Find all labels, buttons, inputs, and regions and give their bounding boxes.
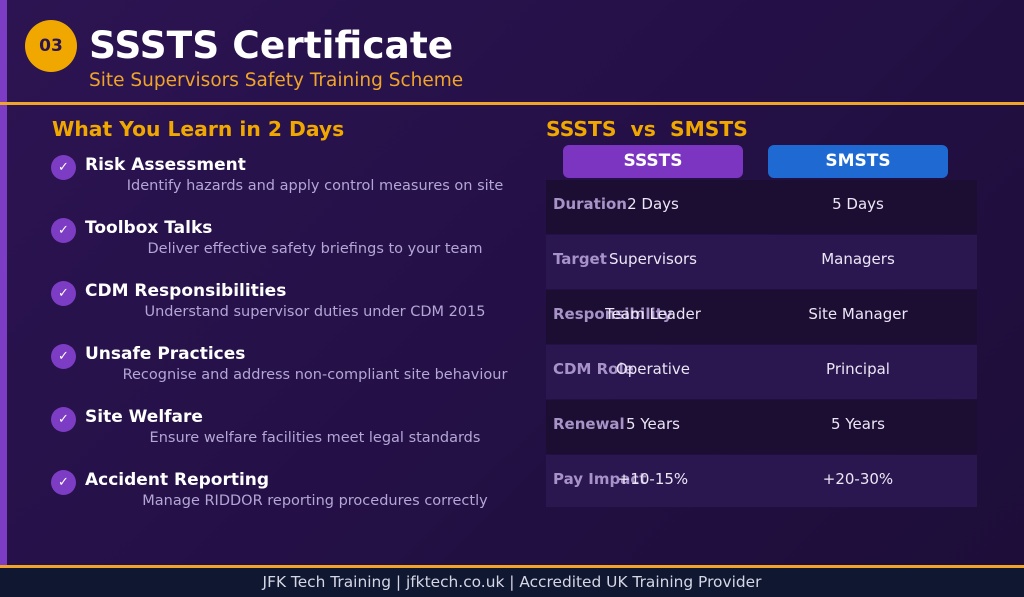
- item: site welfare: ✓: [58, 412, 69, 427]
- item: unsafe practices: [51, 344, 508, 383]
- footer: [0, 565, 1024, 597]
- row: target: Target: [553, 250, 607, 268]
- row: duration: 5 Days: [832, 195, 884, 213]
- row: pay impact: +10-15%: [618, 470, 688, 488]
- item: unsafe practices: Recognise and address non-compliant site behaviour: [123, 367, 507, 383]
- header pill: SMSTS: SMSTS: [825, 151, 891, 171]
- row: CDM role: Operative: [616, 360, 690, 378]
- row: CDM role: CDM Role: [553, 360, 634, 378]
- item: accident reporting: [51, 470, 488, 509]
- item: toolbox talks: [51, 218, 482, 257]
- subtitle: Site Supervisors Safety Training Scheme: [89, 70, 463, 91]
- row: duration: [546, 180, 977, 234]
- row: duration: Duration: [553, 195, 627, 213]
- row: renewal: 5 Years: [831, 415, 885, 433]
- row: target: Supervisors: [609, 250, 697, 268]
- left accent bar: [0, 0, 7, 566]
- item: risk assessment: [51, 155, 503, 194]
- item: CDM: [51, 281, 486, 320]
- item: risk assessment: Identify hazards and apply control measures on site: [127, 178, 503, 194]
- header pill: SMSTS: [768, 145, 948, 178]
- row: pay impact: Pay Impact: [553, 470, 646, 488]
- item: CDM: Understand supervisor duties under CDM 2015: [144, 304, 486, 320]
- row: responsibility: Responsibility: [553, 305, 673, 323]
- row: pay impact: +20-30%: [823, 470, 893, 488]
- row: renewal: [546, 400, 977, 454]
- item: site welfare: Ensure welfare facilities meet legal standards: [150, 430, 480, 446]
- header pill: SSSTS: SSSTS: [623, 151, 683, 171]
- header rule: [0, 102, 1024, 105]
- heading: what you learn: What You Learn in 2 Days: [52, 117, 344, 141]
- heading: comparison: SSSTS vs SMSTS: [546, 117, 748, 141]
- row: CDM role: [546, 345, 977, 399]
- item: accident reporting: ✓: [58, 475, 69, 490]
- row: responsibility: Site Manager: [808, 305, 908, 323]
- row: CDM role: Principal: [826, 360, 890, 378]
- row: renewal: Renewal: [553, 415, 625, 433]
- row: renewal: 5 Years: [626, 415, 680, 433]
- item: toolbox talks: Toolbox Talks: [85, 218, 212, 238]
- item: site welfare: Site Welfare: [85, 407, 203, 427]
- item: CDM: CDM Responsibilities: [85, 281, 286, 301]
- title: SSSTS Certificate: [89, 23, 453, 67]
- badge: 03: [25, 20, 77, 72]
- item: unsafe practices: Unsafe Practices: [85, 344, 245, 364]
- item: toolbox talks: Deliver effective safety briefings to your team: [148, 241, 482, 257]
- item: unsafe practices: ✓: [58, 349, 69, 364]
- row: target: Managers: [821, 250, 895, 268]
- row: target: [546, 235, 977, 289]
- footer: JFK Tech Training | jfktech.co.uk | Accredited UK Training Provider: [263, 573, 761, 591]
- item: accident reporting: Accident Reporting: [85, 470, 269, 490]
- item: risk assessment: Risk Assessment: [85, 155, 246, 175]
- row: responsibility: Team Leader: [605, 305, 701, 323]
- badge: 03: 03: [39, 36, 63, 56]
- item: toolbox talks: ✓: [58, 223, 69, 238]
- row: duration: 2 Days: [627, 195, 679, 213]
- item: accident reporting: Manage RIDDOR reporting procedures correctly: [142, 493, 488, 509]
- item: CDM: ✓: [58, 286, 69, 301]
- item: risk assessment: ✓: [58, 160, 69, 175]
- row: pay impact: [546, 455, 977, 507]
- header pill: SSSTS: [563, 145, 743, 178]
- row: responsibility: [546, 290, 977, 344]
- item: site welfare: [51, 407, 480, 446]
